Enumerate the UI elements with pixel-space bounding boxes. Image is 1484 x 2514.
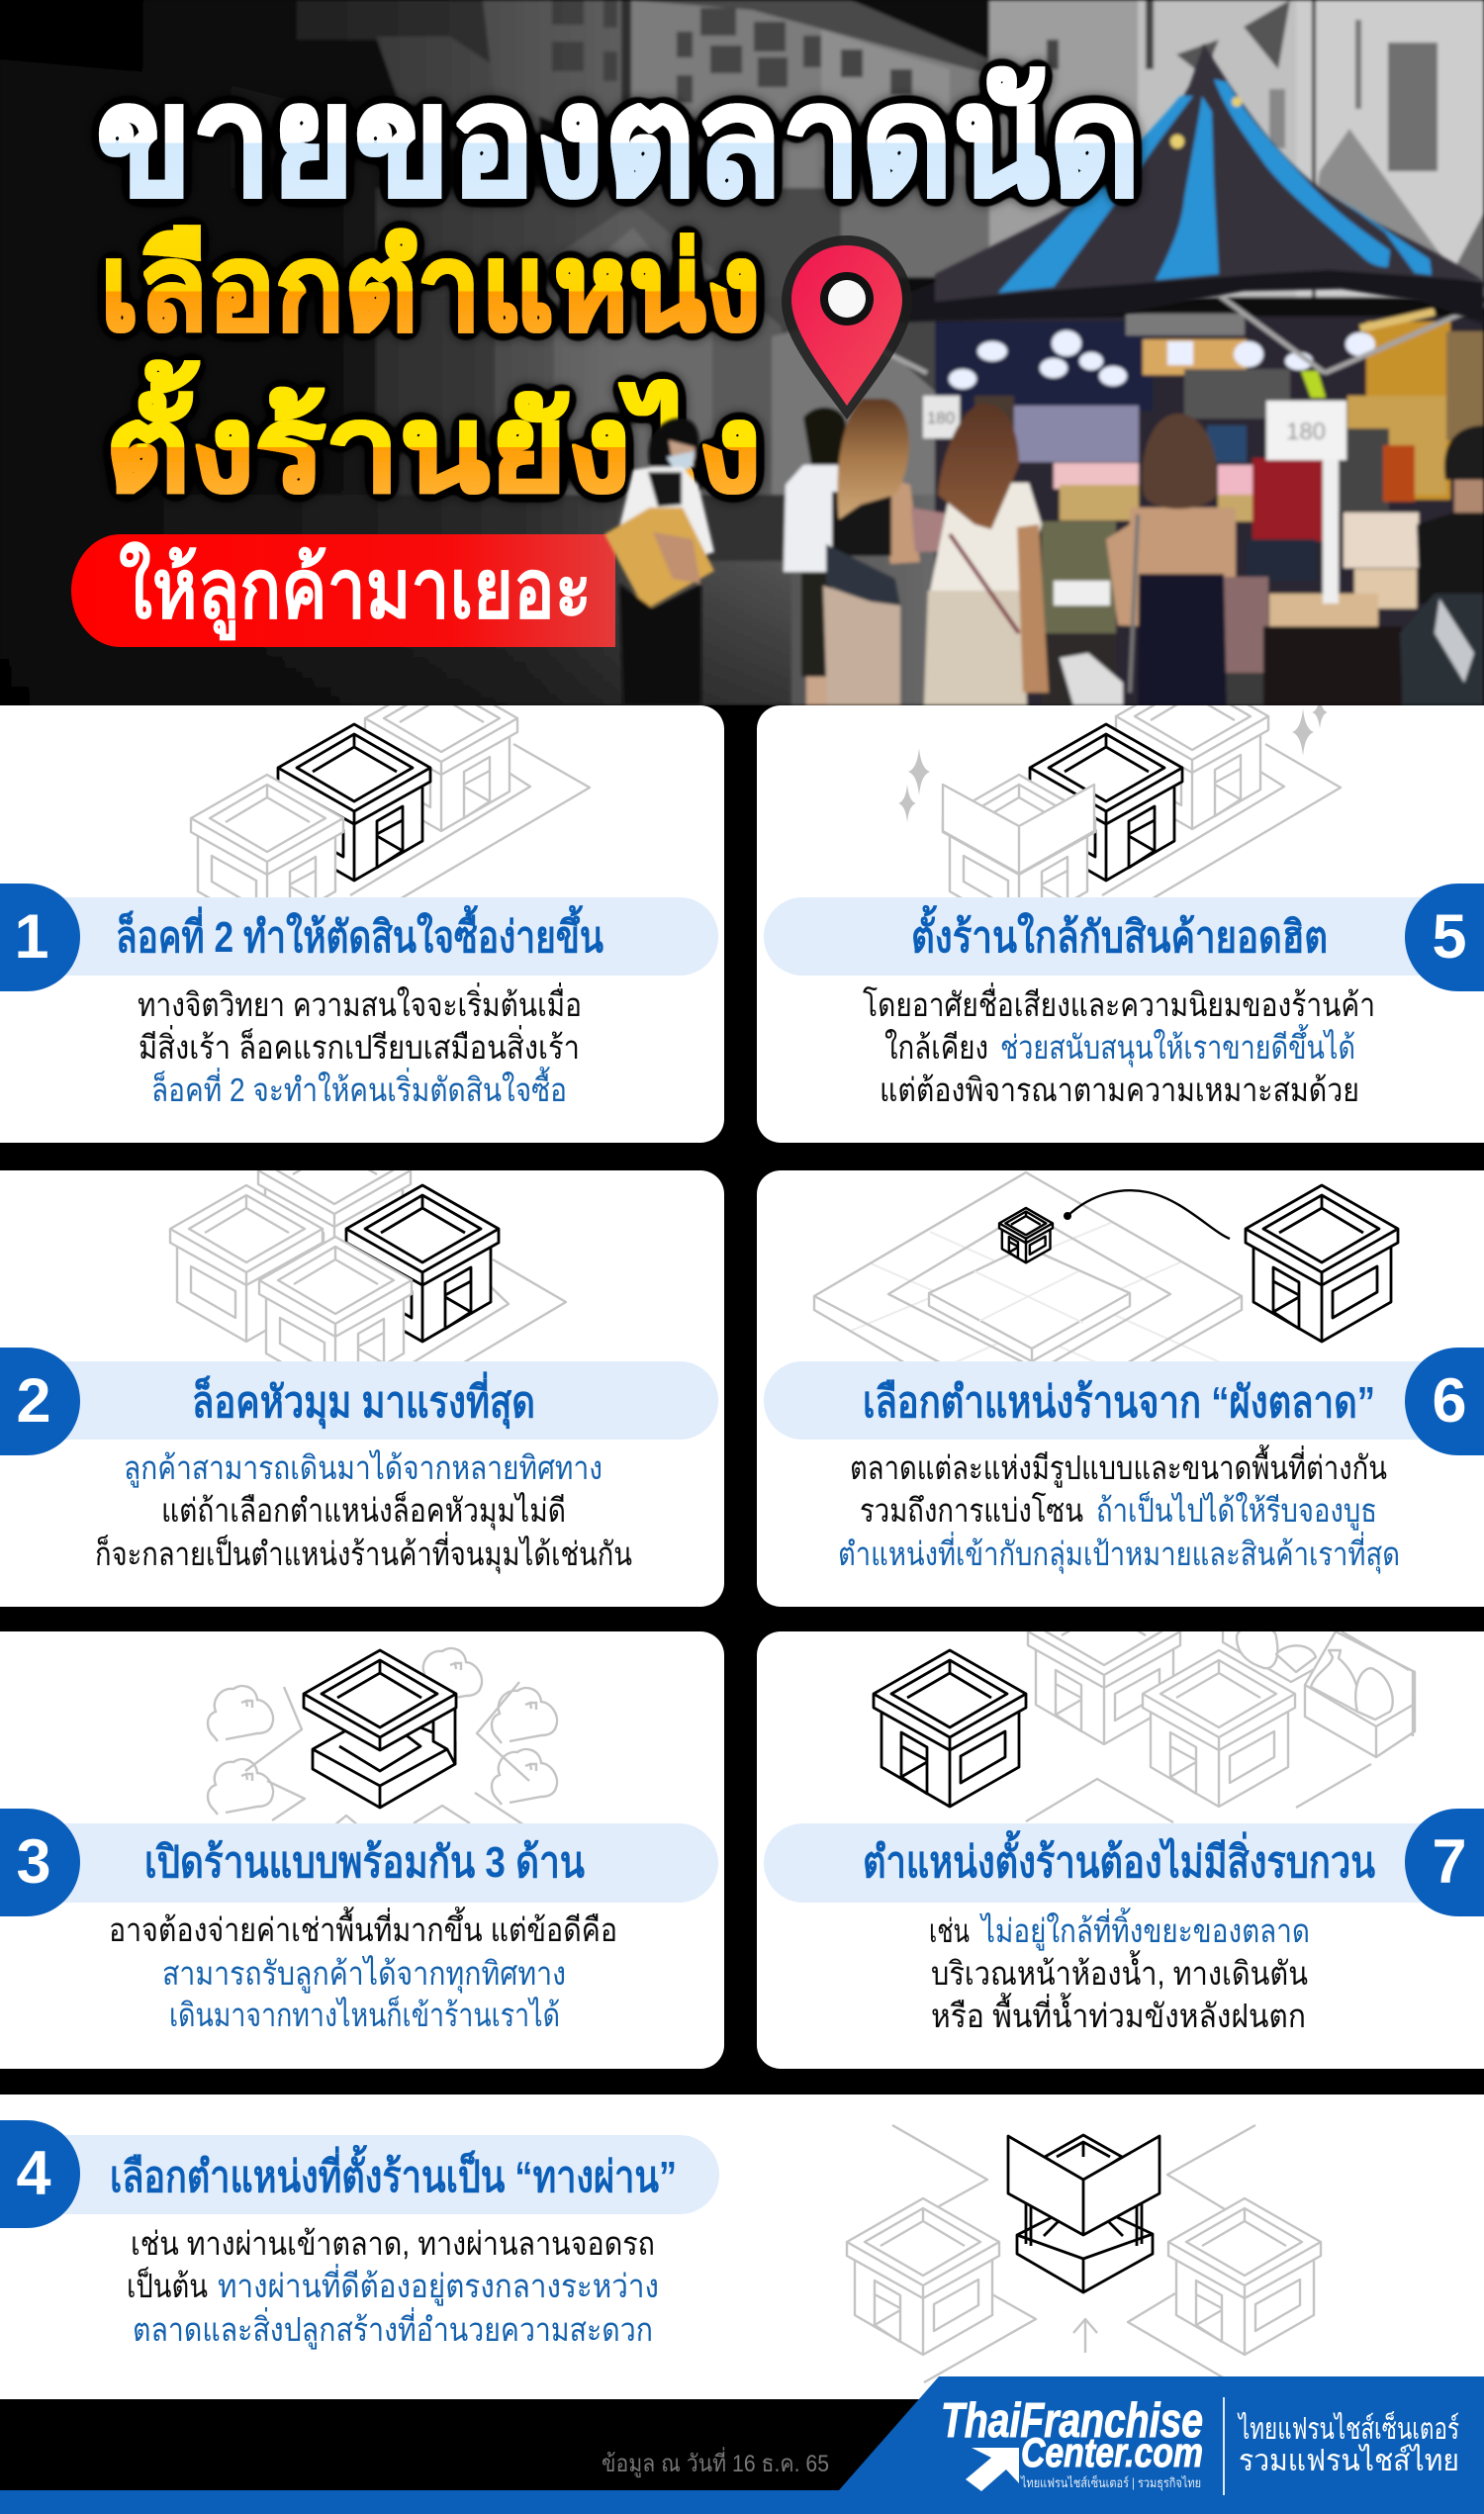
body text: โดยอาศัยชื่อเสียงและความนิยมของร้านค้า: [863, 982, 1375, 1023]
illustration: market floor plan: [813, 1171, 1243, 1361]
number badge: 6: [1432, 1366, 1467, 1436]
title line 3: ตั้งร้านยังไง: [105, 361, 762, 516]
connector curve: [1064, 1190, 1230, 1239]
icon: black shop: [874, 1650, 1026, 1807]
panel: hero banner: [0, 0, 1484, 705]
subtitle pill: [71, 534, 615, 647]
body text: ลูกค้าสามารถเดินมาได้จากหลายทิศทาง: [124, 1449, 603, 1488]
subtitle text: ให้ลูกค้ามาเยอะ: [119, 541, 592, 641]
illustration: shop near popular store: [898, 705, 1342, 897]
number badge: 3: [16, 1827, 51, 1897]
logo: ThaiFranchise Center.com: ไทยแฟรนไชส์เซ็นเตอร์ | รวมธุรกิจไทย: [1020, 2473, 1201, 2491]
stall interior: [935, 317, 1484, 705]
number badge: [1405, 884, 1484, 991]
icon: big shop: [1246, 1185, 1398, 1342]
body text: ตลาดแต่ละแห่งมีรูปแบบและขนาดพื้นที่ต่างกัน: [850, 1444, 1387, 1488]
tent: [908, 44, 1484, 325]
number badge: [0, 1809, 80, 1916]
logo: ThaiFranchise Center.com: [941, 2394, 1203, 2491]
illustration: open three-sided shop with trees: [208, 1648, 557, 1825]
heading: ล็อคหัวมุม มาแรงที่สุด: [192, 1371, 535, 1430]
illustration: shop on walkway: [847, 2125, 1321, 2382]
number badge: 1: [14, 902, 49, 972]
people at stall: [784, 463, 838, 572]
panel: tip 7: [757, 1588, 1484, 2069]
heading bar: [0, 1361, 718, 1440]
number badge: 4: [16, 2139, 51, 2208]
body text: ทางผ่านที่ดีต้องอยู่ตรงกลางระหว่าง: [218, 2264, 659, 2306]
body text: [109, 1907, 617, 2033]
icon: location pin: [782, 235, 912, 419]
body text: [138, 982, 582, 1108]
hero photo: night market street and stall: 180: [1286, 419, 1326, 445]
icon: trash bins: [1223, 1623, 1415, 1757]
heading bar: [0, 2135, 719, 2214]
body text: [838, 1444, 1400, 1574]
panel: tip 1: [0, 675, 724, 1143]
number badge: [1405, 1348, 1484, 1455]
body text: ถ้าเป็นไปได้ให้รีบจองบูธ: [1096, 1491, 1377, 1531]
body text: มีสิ่งเร้า ล็อคแรกเปรียบเสมือนสิ่งเร้า: [139, 1025, 580, 1066]
body text: แต่ต้องพิจารณาตามความเหมาะสมด้วย: [880, 1071, 1359, 1108]
illustration: shop away from trash: [1026, 1588, 1415, 1822]
body text: หรือ พื้นที่น้ำท่วมขังหลังฝนตก: [931, 1993, 1306, 2034]
number badge: 2: [16, 1366, 51, 1436]
title line 2: เลือกตำแหน่ง: [100, 221, 761, 355]
icon: open shop: [304, 1650, 456, 1808]
person with mask and yellow bag: [604, 419, 714, 705]
heading: เลือกตำแหน่งร้านจาก “ผังตลาด”: [863, 1378, 1375, 1427]
number badge: 7: [1432, 1827, 1467, 1897]
icon: arrow up: [1073, 2319, 1097, 2353]
title text: [96, 54, 1141, 516]
hero photo: night market street and stall: [0, 0, 1484, 705]
icon: logo arrow: [966, 2448, 1019, 2491]
body text: ตลาดและสิ่งปลูกสร้างที่อำนวยความสะดวก: [133, 2307, 653, 2350]
heading bar: [764, 1823, 1484, 1903]
heading: เปิดร้านแบบพร้อมกัน 3 ด้าน: [144, 1838, 585, 1887]
heading: ตั้งร้านใกล้กับสินค้ายอดฮิต: [911, 904, 1328, 962]
illustration: corner block: [168, 1170, 568, 1361]
heading bar: [0, 897, 718, 976]
number badge: [0, 2120, 80, 2228]
body text: ก็จะกลายเป็นตำแหน่งร้านค้าที่จนมุมได้เช่นกัน: [95, 1532, 632, 1574]
body text: ล็อคที่ 2 จะทำให้คนเริ่มตัดสินใจซื้อ: [151, 1067, 567, 1108]
body text: ช่วยสนับสนุนให้เราขายดีขึ้นได้: [1000, 1024, 1355, 1068]
body text: แต่ถ้าเลือกตำแหน่งล็อคหัวมุมไม่ดี: [161, 1491, 566, 1531]
body text: บริเวณหน้าห้องน้ำ, ทางเดินตัน: [931, 1950, 1308, 1992]
stall number signs: [1266, 401, 1346, 460]
body text: ทางจิตวิทยา ความสนใจจะเริ่มต้นเมื่อ: [138, 982, 582, 1023]
number badge: [0, 1348, 80, 1455]
panel: tip 3: [0, 1631, 724, 2069]
bunting flags: [1176, 0, 1290, 76]
logo: ThaiFranchise Center.com: Center.com: [1021, 2429, 1203, 2475]
body text: อาจต้องจ่ายค่าเช่าพื้นที่มากขึ้น แต่ข้อดีคือ: [109, 1907, 617, 1948]
body text: เดินมาจากทางไหนก็เข้าร้านเราได้: [169, 1996, 560, 2033]
title line 1: ขายของตลาดนัด: [96, 54, 1141, 229]
body text: เช่น ทางผ่านเข้าตลาด, ทางผ่านลานจอดรถ: [131, 2225, 655, 2262]
panel: tip 4: [0, 2095, 1484, 2399]
building windows: [552, 0, 1361, 148]
body text: เป็นต้น: [127, 2267, 208, 2304]
tagline: [1238, 2410, 1459, 2477]
body text: [929, 1908, 1310, 2034]
panel: tip 2: [0, 1127, 724, 1607]
footer blue band: [0, 2376, 1484, 2514]
body text: รวมถึงการแบ่งโซน: [860, 1492, 1083, 1529]
body text: [127, 2225, 659, 2350]
footer: [0, 2376, 1484, 2514]
heading bar: [0, 1823, 718, 1903]
heading: ตำแหน่งตั้งร้านต้องไม่มีสิ่งรบกวน: [863, 1829, 1375, 1887]
tagline: รวมแฟรนไชส์ไทย: [1239, 2443, 1459, 2477]
body text: [863, 982, 1375, 1108]
body text: สามารถรับลูกค้าได้จากทุกทิศทาง: [162, 1955, 566, 1994]
panel: tip 6: [757, 1170, 1484, 1607]
heading: เลือกตำแหน่งที่ตั้งร้านเป็น “ทางผ่าน”: [110, 2144, 677, 2201]
heading bar: [764, 897, 1484, 976]
body text: [95, 1449, 632, 1574]
heading: ล็อคที่ 2 ทำให้ตัดสินใจซื้อง่ายขึ้น: [116, 904, 603, 962]
icon: black shop with signboards: [1008, 2135, 1159, 2292]
number badge: 5: [1432, 902, 1467, 972]
body text: ใกล้เคียง: [884, 1029, 988, 1066]
stall lights: [949, 330, 1375, 389]
date note: ข้อมูล ณ วันที่ 16 ธ.ค. 65: [602, 2447, 829, 2478]
icon: small shop on plan: [999, 1208, 1053, 1262]
tent poles: [890, 296, 1484, 378]
number badge: [1405, 1809, 1484, 1916]
body text: ไม่อยู่ใกล้ที่ทิ้งขยะของตลาด: [978, 1908, 1310, 1951]
hero photo: night market street and stall: 180: [927, 409, 955, 427]
logo: ThaiFranchise Center.com: ThaiFranchise: [941, 2394, 1203, 2448]
body text: เช่น: [929, 1912, 970, 1949]
illustration: second block between shops: [190, 705, 592, 897]
number badge: [0, 884, 80, 991]
heading bar: [764, 1361, 1484, 1440]
panel: tip 5: [757, 673, 1484, 1143]
